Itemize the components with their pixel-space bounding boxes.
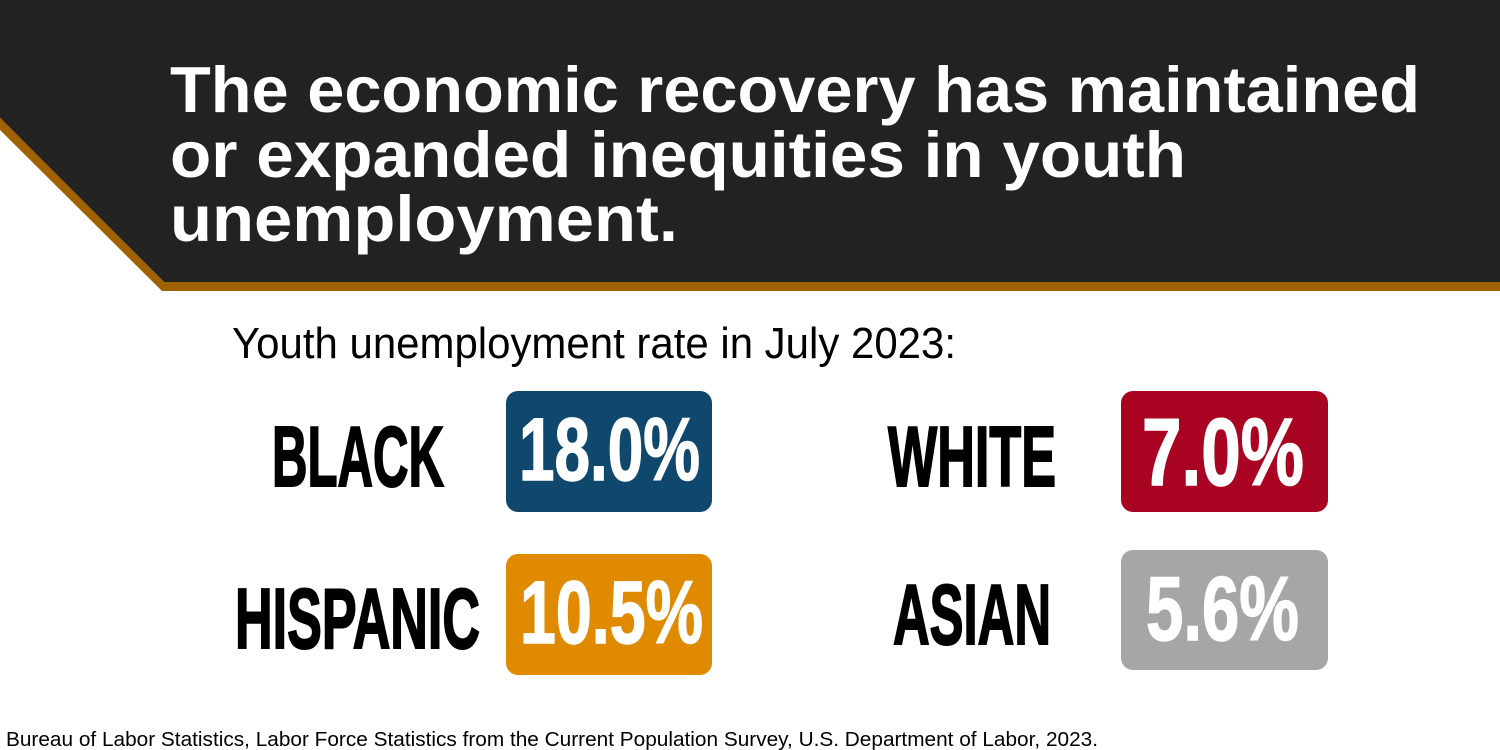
stat: Black: 18.0% <box>519 399 700 499</box>
title: The economic recovery has maintained <box>170 54 1420 126</box>
title <box>170 54 1420 255</box>
subheading: Youth unemployment rate in July 2023: <box>232 319 956 368</box>
stat: White: 7.0% <box>1142 399 1304 506</box>
header banner <box>0 0 1500 291</box>
stat: Hispanic: 10.5% <box>520 562 703 662</box>
stat: Black <box>272 391 712 512</box>
stat: Asian: 5.6% <box>1146 559 1299 660</box>
stat: Asian: ASIAN <box>893 568 1051 663</box>
stat: Hispanic: HISPANIC <box>235 572 480 667</box>
stat: White <box>888 391 1328 512</box>
stat: Asian <box>893 550 1328 670</box>
stat: Black: BLACK <box>272 410 444 505</box>
title: unemployment. <box>170 183 678 255</box>
title: or expanded inequities in youth <box>170 119 1186 191</box>
stat: Hispanic <box>235 554 712 675</box>
stat: White: WHITE <box>888 410 1056 505</box>
